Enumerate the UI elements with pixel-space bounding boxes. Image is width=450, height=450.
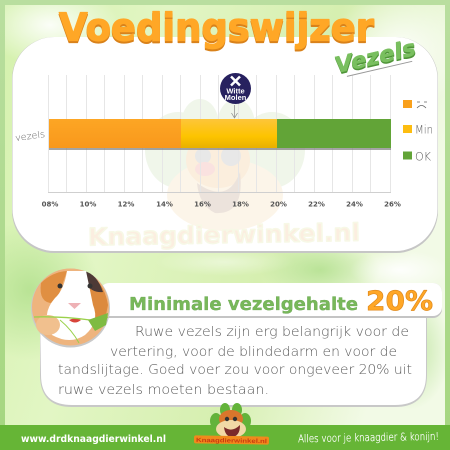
description paragraph [58,324,412,398]
watermark: Knaagdierwinkel.nl: Knaagdierwinkel.nl [88,219,360,251]
legend: OK [415,150,431,164]
axis tick labels: 12% [118,200,134,208]
icon: guinea pig photo [31,268,110,348]
logo: Knaagdierwinkel [194,403,269,445]
description paragraph: vertering, voor de blindedarm en voor de [110,344,397,360]
subtitle: Vezels: Vezels [333,36,418,79]
legend [403,100,433,164]
axis tick labels: 24% [346,200,363,208]
heading: Minimale vezelgehalte: Minimale vezelgehalte [129,294,358,315]
subtitle: Vezels: Vezels [333,38,418,80]
footer band [0,425,450,450]
row label: vezels [15,130,46,144]
stacked bar: vezels [49,119,391,150]
title: Voedingswijzer [59,8,374,52]
axis tick labels [42,200,401,208]
axis tick labels: 08% [42,200,58,208]
marker: Witte Molen: Molen [225,93,247,102]
axis tick labels: 22% [308,200,325,208]
logo: Knaagdierwinkel: Knaagdierwinkel.nl [196,438,267,445]
marker: Witte Molen: Witte [226,86,245,96]
axis tick labels: 10% [80,200,96,208]
gridlines [48,75,390,192]
legend: Min [415,122,433,136]
description paragraph: Ruwe vezels zijn erg belangrijk voor de [135,324,409,340]
watermark: hamster mascot [145,99,305,231]
panel: chart card [12,37,438,253]
header strip: minimum fibre [100,283,442,318]
description paragraph: tandslijtage. Goed voer zou voor ongeveer 20% uit [58,362,412,378]
website url: www.drdknaagdierwinkel.nl [21,434,166,445]
axis tick labels: 20% [270,200,287,208]
axis tick labels: 14% [156,200,173,208]
value: 20%: 20% [366,286,433,317]
panel: description text [40,310,427,407]
axis tick labels: 26% [384,200,401,208]
marker: Witte Molen [220,73,251,118]
description paragraph: ruwe vezels moeten bestaan. [58,382,269,398]
axis tick labels: 18% [232,200,249,208]
axis tick labels: 16% [194,200,211,208]
axis line [48,192,391,194]
title: Voedingswijzer [59,6,374,50]
